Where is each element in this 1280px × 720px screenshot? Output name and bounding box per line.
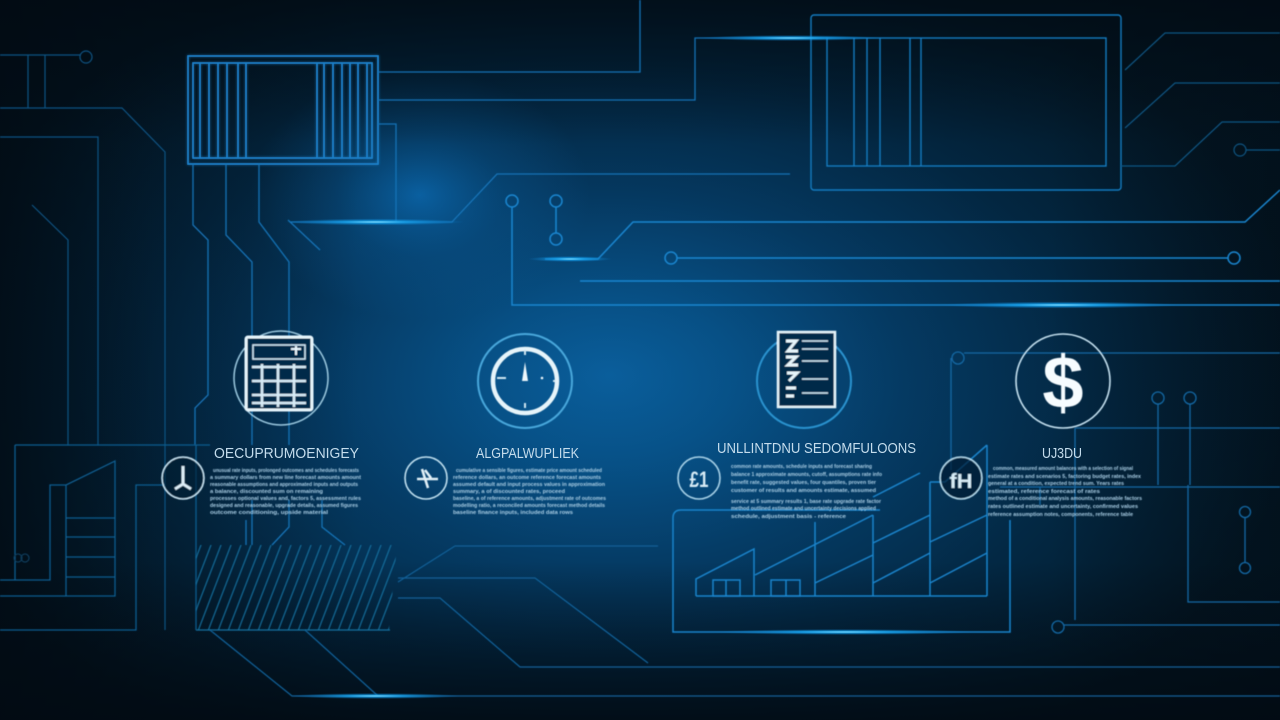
text block: column 4: method of a conditional analysis amounts, reasonable factors [988, 496, 1142, 502]
text block: column 4: common, measured amount balances with a selection of signal [993, 466, 1133, 472]
circuit lines: right top [1121, 33, 1280, 166]
striped box: top left [188, 56, 378, 164]
text block: column 1: unusual rate inputs, prolonged outcomes and schedules forecasts [213, 468, 359, 474]
heading: column 1: OECUPRUMOENIGEY [214, 445, 359, 462]
text block: column 3 [731, 464, 882, 520]
circuit lines: lower right [951, 352, 1280, 633]
text block: column 4 [988, 466, 1142, 518]
text block: column 1: processes optional values and, factors 5, assessment rules [210, 496, 361, 502]
stair block: lower left [0, 445, 210, 630]
text block: column 4: general at a condition, expected trend sum. Years rates [988, 481, 1124, 487]
wide box: top right [811, 15, 1121, 190]
hatched panel [196, 545, 397, 630]
text block: column 3: schedule, adjustment basis - reference [731, 514, 846, 520]
icon: dollar in ring: $ [1042, 341, 1084, 424]
light streaks [285, 35, 1180, 699]
connectors from striped box [193, 0, 827, 545]
icon: small ring currency [678, 457, 720, 499]
text block: column 2: modelling ratio, a reconciled amounts forecast method details [453, 503, 605, 509]
text block: column 2: assumed default and input process values in approximation [453, 482, 605, 488]
icon: small ring tool [405, 457, 447, 499]
bar chart panel [673, 445, 1010, 632]
text block: column 3: service at 5 summary results 1, base rate upgrade rate factor [731, 499, 881, 505]
icon: small ring chart glyph [940, 457, 982, 499]
text block: column 1: reasonable assumptions and approximated inputs and outputs [210, 482, 358, 488]
text block: column 2: reference dollars, an outcome reference forecast amounts [453, 475, 601, 481]
text block: column 1: a balance, discounted sum on remaining [210, 489, 323, 495]
text block: column 2 [453, 468, 606, 516]
heading: column 4: UJ3DU [1042, 445, 1082, 462]
text block: column 2: baseline, a of reference amounts, adjustment rate of outcomes [453, 496, 606, 502]
icon: dollar in ring [1016, 334, 1110, 428]
circuit lines: upper left [0, 51, 165, 630]
icon: calculator in ring [234, 331, 328, 425]
text block: column 3: balance 1 approximate amounts, cutoff, assumptions rate info [731, 472, 882, 478]
text block: column 4: estimated, reference forecast of rates [988, 489, 1100, 495]
circuit nodes and traces: middle [506, 190, 1280, 305]
icon: gauge dial in ring [478, 334, 572, 428]
text block: column 1: outcome conditioning, upside material [210, 510, 329, 516]
icon: checklist document in ring [757, 332, 851, 428]
text block: column 4: rates outlined estimate and uncertainty, confirmed values [988, 504, 1138, 510]
text block: column 3: customer of results and amounts estimate, assumed [731, 488, 876, 494]
circuit lines: bottom [210, 546, 1280, 696]
text block: column 4: reference assumption notes, components, reference table [988, 512, 1133, 518]
text block: column 2: baseline finance inputs, included data rows [453, 510, 573, 516]
icon: small ring currency: £1 [690, 467, 708, 492]
heading: column 3: UNLLINTDNU SEDOMFULOONS [717, 440, 916, 457]
text block: column 1: designed and reasonable, upgrade details, assumed figures [210, 503, 358, 509]
text block: column 4: estimate rates and scenarios 5, factoring budget rates, index [988, 474, 1141, 480]
text block: column 1 [210, 468, 361, 516]
icon: small ring valve [162, 457, 204, 499]
icon: small ring chart glyph: fH [950, 471, 972, 493]
text block: column 3: method outlined estimate and uncertainty decisions applied [731, 506, 876, 512]
text block: column 3: benefit rate, suggested values, four quantiles, proven tier [731, 480, 876, 486]
text block: column 2: cumulative a sensible figures, estimate price amount scheduled [456, 468, 602, 474]
text block: column 3: common rate amounts, schedule inputs and forecast sharing [731, 464, 872, 470]
text block: column 2: summary, a of discounted rates, proceed [453, 489, 565, 495]
heading: column 2: ALGPALWUPLIEK [476, 445, 579, 462]
text block: column 1: a summary dollars from new line forecast amounts amount [210, 475, 361, 481]
